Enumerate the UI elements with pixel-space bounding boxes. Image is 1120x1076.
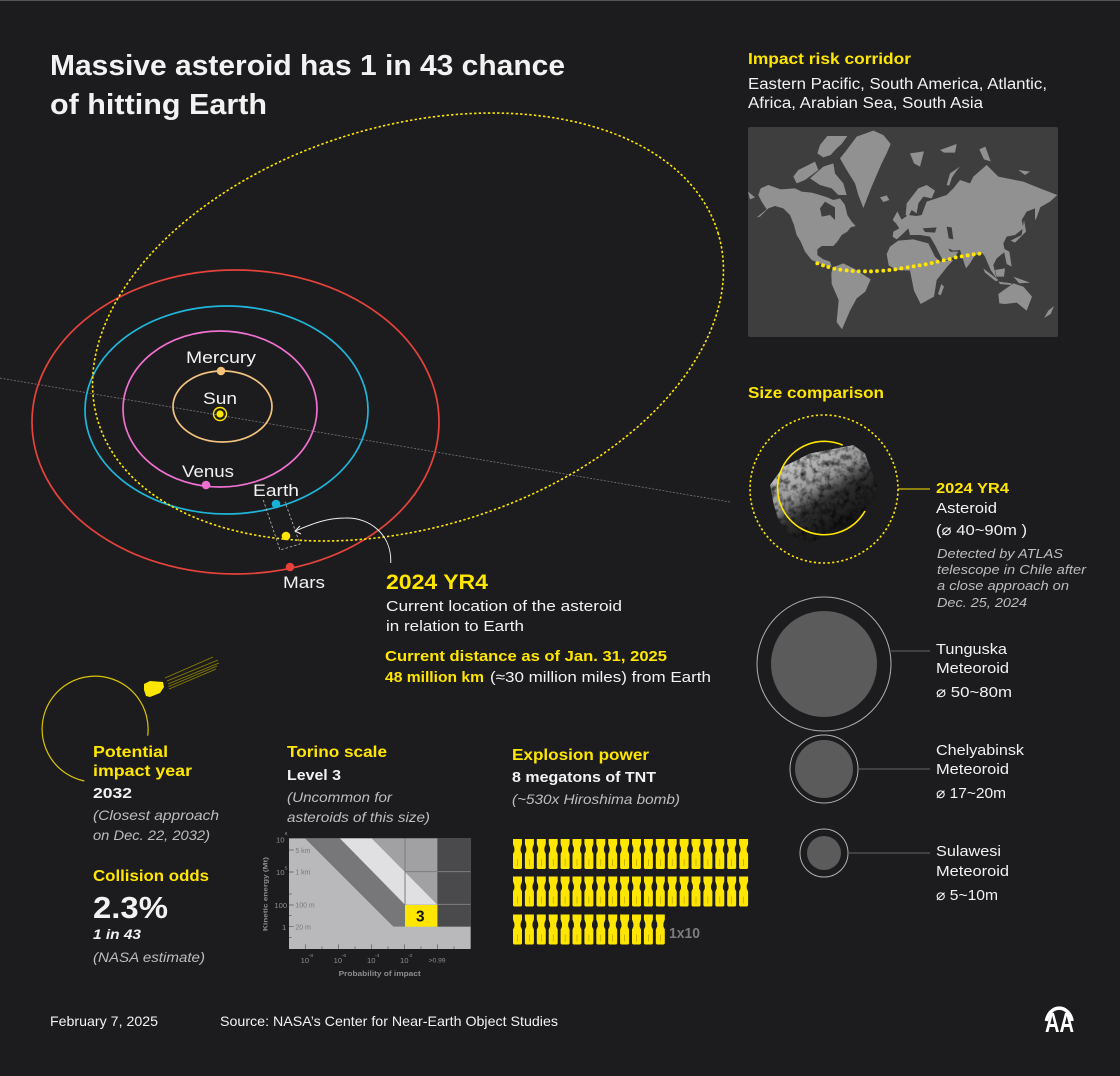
North America: [757, 185, 856, 267]
text block: asteroid location: 48 million km: [385, 669, 484, 686]
size item: Chelyabinsk: ⌀ 17~20m: [936, 785, 1006, 802]
text block: asteroid location: [385, 571, 711, 686]
chart: Torino scale: -8: [309, 953, 313, 959]
size item: Sulawesi: [800, 829, 1009, 904]
size item: Sulawesi: Sulawesi: [936, 843, 1001, 860]
icon: incoming asteroid: [42, 657, 219, 781]
Australia: [998, 283, 1032, 311]
text block: potential impact year: 2032: [93, 786, 132, 802]
impact corridor: [815, 252, 981, 273]
chart: Torino scale: 100: [274, 901, 287, 910]
distance box: [263, 500, 300, 550]
text block: asteroid location: in relation to Earth: [386, 618, 524, 635]
text block: collision odds: 1 in 43: [93, 926, 141, 942]
Novaya Zemlya: [947, 167, 960, 186]
chart: Torino scale: 8: [285, 831, 288, 837]
text block: potential impact year: (Closest approach: [93, 807, 219, 823]
Alaska tip: [748, 192, 755, 199]
text block: collision odds: 2.3%: [93, 890, 168, 925]
text block: explosion power: Explosion power: [512, 747, 649, 764]
text block: Torino scale: (Uncommon for: [287, 789, 393, 805]
chart: Torino scale: 10: [334, 956, 342, 965]
text block: collision odds: Collision odds: [93, 868, 209, 885]
text block: potential impact year: impact year: [93, 763, 192, 780]
text block: asteroid location: (≈30 million miles) from Earth: [490, 669, 711, 686]
chart: Torino scale: 3: [416, 909, 425, 926]
title: Massive asteroid has 1 in 43 chance: [50, 50, 565, 82]
size item: Chelyabinsk: [790, 735, 1025, 803]
Eurasia: [893, 165, 1057, 279]
text block: asteroid location: 2024 YR4: [386, 571, 488, 594]
text block: potential impact year: on Dec. 22, 2032): [93, 827, 210, 843]
text block: collision odds: (NASA estimate): [93, 949, 205, 965]
label: Mars: Mars: [283, 573, 325, 592]
text block: potential impact year: [93, 744, 219, 843]
Greenland: [840, 131, 891, 208]
chart: Torino scale: -4: [375, 953, 380, 959]
label: 2024 YR4: Detected by ATLAS: [937, 546, 1063, 561]
legend: 1x10: 1x10: [669, 925, 700, 942]
chart: Torino scale: Kinetic energy (Mt): [263, 857, 270, 931]
Japan and Sakhalin: [1011, 203, 1042, 243]
size item: Tunguska: [757, 597, 1012, 731]
label: 2024 YR4: [936, 481, 1087, 610]
size item: Chelyabinsk: Chelyabinsk: [936, 742, 1025, 759]
chart: Torino scale: 100 m: [295, 903, 315, 910]
Madagascar: [938, 284, 944, 295]
heading: impact risk corridor: [748, 51, 1047, 112]
title: [50, 50, 565, 121]
footer: source: Source: NASA’s Center for Near-Earth Object Studies: [220, 1013, 558, 1029]
orbit: Venus: [123, 331, 317, 487]
chart: Torino scale: 10: [400, 956, 409, 965]
New Zealand: [1044, 306, 1054, 318]
label: 2024 YR4: Dec. 25, 2024: [937, 595, 1027, 610]
size item: Tunguska: Tunguska: [936, 641, 1008, 658]
logo: AA: AA: [1045, 1007, 1074, 1038]
text block: potential impact year: Potential: [93, 744, 168, 761]
orbit: asteroid 2024 YR4: [40, 41, 776, 613]
heading: impact risk corridor: Eastern Pacific, South America, Atlantic,: [748, 76, 1047, 93]
chart: Torino scale: 10: [301, 956, 309, 965]
label: Venus: Venus: [182, 462, 234, 481]
planet: Venus: [202, 481, 210, 489]
size item: Chelyabinsk: Meteoroid: [936, 761, 1009, 778]
label: 2024 YR4: Asteroid: [936, 500, 997, 517]
chart: Torino scale: 10: [276, 835, 285, 844]
label: 2024 YR4: (⌀ 40~90m ): [936, 522, 1027, 539]
planet: Mars: [286, 563, 294, 571]
footer: date: February 7, 2025: [50, 1013, 158, 1029]
label: 2024 YR4: 2024 YR4: [936, 481, 1009, 497]
size item: Sulawesi: Meteoroid: [936, 863, 1009, 880]
chart: Torino scale: Probability of impact: [339, 969, 421, 978]
text block: asteroid location: Current distance as of Jan. 31, 2025: [385, 648, 667, 665]
pictogram: bombs: [513, 839, 748, 944]
size item: Sulawesi: ⌀ 5~10m: [936, 887, 998, 904]
text block: explosion power: [512, 747, 680, 807]
Scandinavia: [906, 185, 935, 217]
orbit diagram: [0, 41, 776, 613]
Iceland: [880, 195, 889, 202]
world map: [748, 127, 1058, 337]
Arctic islands: [793, 136, 847, 195]
heading: impact risk corridor: Impact risk corridor: [748, 51, 911, 68]
size item: Tunguska: Meteoroid: [936, 660, 1009, 677]
text block: Torino scale: Torino scale: [287, 744, 387, 761]
South America: [831, 263, 871, 329]
text block: Torino scale: [287, 744, 430, 825]
text block: explosion power: (~530x Hiroshima bomb): [512, 791, 680, 807]
chart: Torino scale: 1 km: [295, 870, 311, 877]
planet: Earth: [272, 500, 280, 508]
label: Earth: Earth: [253, 481, 299, 500]
title: of hitting Earth: [50, 89, 267, 121]
Southeast Asia islands: [983, 248, 1030, 285]
Arctic Russia and Svalbard islands: [910, 144, 1030, 175]
orbit: Mercury: [173, 371, 272, 442]
chart: Torino scale: >0.99: [429, 958, 446, 965]
size item: 2024 YR4: [750, 415, 1087, 610]
planet: Mercury: [217, 367, 225, 375]
dotted size circle: [750, 415, 898, 563]
chart: Torino scale: 10: [276, 868, 285, 877]
chart: Torino scale: 1: [282, 923, 286, 932]
chart: Torino scale: 5: [285, 866, 288, 872]
orbit: Mars: [32, 270, 439, 574]
Africa: [887, 239, 953, 304]
asteroid position: [282, 532, 290, 540]
heading: size comparison: Size comparison: [748, 385, 884, 402]
text block: explosion power: 8 megatons of TNT: [512, 770, 656, 786]
chart: Torino scale: 20 m: [295, 925, 311, 932]
text block: Torino scale: Level 3: [287, 768, 341, 784]
size item: Tunguska: ⌀ 50~80m: [936, 684, 1012, 701]
orbit: Earth: [85, 306, 368, 514]
text block: asteroid location: Current location of the asteroid: [386, 598, 622, 615]
chart: Torino scale: 5 km: [295, 848, 311, 855]
Black Sea and Caspian: [923, 227, 953, 239]
chart: Torino scale: [263, 831, 471, 978]
text block: collision odds: [93, 868, 209, 965]
chart: Torino scale: -6: [342, 953, 346, 959]
label: Mercury: Mercury: [186, 348, 257, 367]
heading: impact risk corridor: Africa, Arabian Sea, South Asia: [748, 95, 983, 112]
solid size arc: [778, 441, 865, 535]
icon: asteroid rock: [770, 445, 877, 543]
UK: [893, 211, 902, 223]
label: 2024 YR4: telescope in Chile after: [937, 562, 1087, 577]
text block: Torino scale: asteroids of this size): [287, 809, 430, 825]
arrow: [295, 518, 391, 563]
label: 2024 YR4: a close approach on: [937, 578, 1069, 593]
chart: Torino scale: 10: [367, 956, 376, 965]
chart: Torino scale: -2: [408, 953, 413, 959]
icon: Sun: [214, 408, 226, 420]
label: Sun: Sun: [203, 389, 237, 408]
